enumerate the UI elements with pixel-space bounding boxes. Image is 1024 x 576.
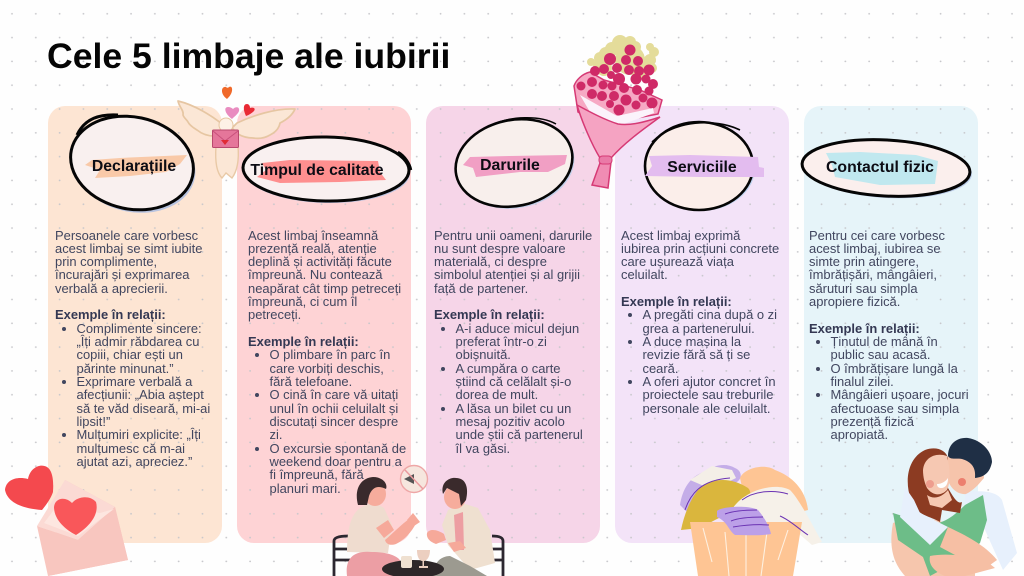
text: Timpul de calitate description and examples: petreceți. bbox=[248, 307, 301, 322]
text: Timpul de calitate description and examples: care vorbiți deschis, bbox=[270, 361, 384, 376]
text: Contactul fizic description and examples: apropiere fizică. bbox=[809, 294, 900, 309]
text: Declarațiile description and examples: Exemple în relații: bbox=[55, 307, 166, 322]
text: Darurile description and examples bbox=[434, 228, 592, 456]
text: Declarațiile description and examples bbox=[54, 228, 210, 469]
heading badge: Contactul fizic: Contactul fizic bbox=[826, 159, 934, 176]
heading badge: Timpul de calitate bbox=[242, 136, 411, 204]
text: Contactul fizic description and examples: acest limbaj, iubirea se bbox=[809, 241, 941, 256]
text: Timpul de calitate description and examples: Acest limbaj înseamnă bbox=[248, 228, 378, 242]
text: Darurile description and examples: dorea de mult. bbox=[456, 387, 538, 402]
text: Timpul de calitate description and examples: fi împreună, fără bbox=[270, 467, 364, 482]
text: Darurile description and examples: materială, ci despre bbox=[434, 254, 547, 269]
text: Declarațiile description and examples: să te văd diseară, mi-ai bbox=[76, 401, 210, 416]
text: Darurile description and examples: A cumpăra o carte bbox=[456, 361, 560, 376]
text: Serviciile description and examples: A oferi ajutor concret în bbox=[642, 374, 776, 389]
text: Darurile description and examples: unde știi că partenerul bbox=[456, 427, 583, 442]
title: Cele 5 limbaje ale iubirii bbox=[47, 36, 450, 76]
panel: Declarațiile background bbox=[48, 106, 222, 543]
text: Serviciile description and examples: grea a partenerului. bbox=[642, 321, 755, 336]
text: Timpul de calitate description and examples: planuri mari. bbox=[270, 481, 341, 496]
text: Contactul fizic description and examples: finalul zilei. bbox=[830, 374, 894, 389]
text: Declarațiile description and examples: prin complimente, bbox=[55, 254, 157, 269]
heading badge: Serviciile: Serviciile bbox=[667, 159, 737, 176]
text: Declarațiile description and examples: părinte minunat.” bbox=[76, 361, 174, 376]
text: Timpul de calitate description and examples: unul în ochii celuilalt și bbox=[270, 401, 398, 416]
illustration: couple talking at a table bbox=[334, 466, 503, 576]
text: Darurile description and examples: A lăsa un bilet cu un bbox=[456, 401, 571, 416]
heading badge: Serviciile bbox=[645, 122, 764, 211]
icon: heart and envelope bbox=[5, 466, 128, 576]
text: Contactul fizic description and examples: Mângâieri ușoare, jocuri bbox=[830, 387, 969, 402]
text: Contactul fizic description and examples: prezență fizică bbox=[830, 414, 914, 429]
text: Serviciile description and examples: iubirea prin acțiuni concrete bbox=[621, 241, 779, 256]
heading badge: Timpul de calitate: Timpul de calitate bbox=[250, 162, 384, 179]
text: Serviciile description and examples: personale ale celuilalt. bbox=[642, 401, 771, 416]
text: Serviciile description and examples: Exemple în relații: bbox=[621, 294, 732, 309]
text: Timpul de calitate description and examples: prezență reală, atenție bbox=[248, 241, 377, 256]
panel: Darurile background bbox=[426, 106, 600, 543]
illustration: laundry basket bbox=[680, 465, 822, 576]
panel: Timpul de calitate background bbox=[237, 106, 411, 543]
text: Timpul de calitate description and examples: O plimbare în parc în bbox=[270, 347, 390, 362]
text: Darurile description and examples: mesaj pozitiv acolo bbox=[456, 414, 565, 429]
text: Declarațiile description and examples: încurajări și exprimarea bbox=[55, 267, 189, 282]
text: Timpul de calitate description and examples: O excursie spontană de bbox=[270, 441, 406, 456]
text: Darurile description and examples: nu sunt despre valoare bbox=[434, 241, 566, 256]
text: Declarațiile description and examples: „Îți admir răbdarea cu bbox=[76, 334, 199, 349]
text: Serviciile description and examples bbox=[621, 228, 779, 416]
text: Contactul fizic description and examples: Pentru cei care vorbesc bbox=[809, 228, 945, 242]
heading badge: Darurile bbox=[447, 109, 583, 219]
text: Serviciile description and examples: ceară. bbox=[642, 361, 678, 376]
text: Timpul de calitate description and examples: împreună, ci cum îl bbox=[248, 294, 357, 309]
text: Declarațiile description and examples: Persoanele care vorbesc bbox=[55, 228, 198, 242]
text: Timpul de calitate description and examples: împreună. Nu contează bbox=[248, 267, 382, 282]
text: Contactul fizic description and examples: îmbrățișări, mângâieri, bbox=[809, 267, 937, 282]
text: Serviciile description and examples: proiectele sau treburile bbox=[642, 387, 773, 402]
text: Timpul de calitate description and examples: O cină în care vă uitați bbox=[270, 387, 398, 402]
text: Darurile description and examples: obișnuită. bbox=[456, 347, 511, 362]
text: Darurile description and examples: Exemple în relații: bbox=[434, 307, 545, 322]
text: Darurile description and examples: îl va găsi. bbox=[456, 441, 510, 456]
text: Declarațiile description and examples: acest limbaj se simt iubite bbox=[55, 241, 202, 256]
text: Timpul de calitate description and examples: zi. bbox=[270, 427, 282, 442]
text: Contactul fizic description and examples: public sau acasă. bbox=[830, 347, 930, 362]
text: Darurile description and examples: preferat într-o zi bbox=[456, 334, 547, 349]
text: Timpul de calitate description and examples bbox=[248, 228, 406, 496]
text: Contactul fizic description and examples: apropiată. bbox=[830, 427, 888, 442]
text: Serviciile description and examples: care ușurează viața bbox=[621, 254, 734, 269]
text: Serviciile description and examples: celuilalt. bbox=[621, 267, 668, 282]
text: Declarațiile description and examples: Mulțumiri explicite: „Îți bbox=[76, 427, 201, 442]
text: Darurile description and examples: știind că celălalt și-o bbox=[456, 374, 571, 389]
panel: Contactul fizic background bbox=[804, 106, 978, 543]
text: Contactul fizic description and examples: săruturi sau simpla bbox=[809, 281, 918, 296]
text: Contactul fizic description and examples: simte prin atingere, bbox=[809, 254, 919, 269]
text: Timpul de calitate description and examples: deplină și activități făcute bbox=[248, 254, 392, 269]
heading badge: Darurile: Darurile bbox=[480, 157, 540, 174]
text: Declarațiile description and examples: Exprimare verbală a bbox=[76, 374, 192, 389]
text: Declarațiile description and examples: ajutat azi, apreciez.” bbox=[76, 454, 192, 469]
text: Timpul de calitate description and examples: neapărat cât timp petreceți bbox=[248, 281, 401, 296]
illustration: hugging couple bbox=[891, 438, 1017, 576]
text: Darurile description and examples: simbolul atenției și al grijii bbox=[434, 267, 580, 282]
text: Timpul de calitate description and examples: weekend doar pentru a bbox=[270, 454, 402, 469]
icon: dove carrying a love letter bbox=[178, 87, 295, 178]
text: Serviciile description and examples: A pregăti cina după o zi bbox=[642, 307, 777, 322]
heading badge: Declarațiile bbox=[62, 105, 204, 224]
icon: bouquet of flowers bbox=[574, 35, 662, 188]
heading badge: Contactul fizic bbox=[801, 136, 973, 202]
heading badge: Declarațiile: Declarațiile bbox=[92, 158, 176, 175]
text: Contactul fizic description and examples bbox=[808, 228, 969, 442]
text: Contactul fizic description and examples: O îmbrățișare lungă la bbox=[830, 361, 958, 376]
text: Declarațiile description and examples: verbală a aprecierii. bbox=[55, 281, 168, 296]
text: Declarațiile description and examples: mulțumesc că m-ai bbox=[76, 441, 185, 456]
panel: Serviciile background bbox=[615, 106, 789, 543]
text: Darurile description and examples: Pentru unii oameni, darurile bbox=[434, 228, 592, 242]
text: Contactul fizic description and examples: afectuoase sau simpla bbox=[830, 401, 959, 416]
text: Serviciile description and examples: A duce mașina la bbox=[642, 334, 741, 349]
text: Contactul fizic description and examples: Ținutul de mână în bbox=[830, 334, 938, 349]
text: Serviciile description and examples: Acest limbaj exprimă bbox=[621, 228, 740, 242]
text: Timpul de calitate description and examples: Exemple în relații: bbox=[248, 334, 359, 349]
text: Timpul de calitate description and examples: fără telefoane. bbox=[270, 374, 352, 389]
text: Declarațiile description and examples: afecțiunii: „Abia aștept bbox=[76, 387, 204, 402]
text: Darurile description and examples: A-i aduce micul dejun bbox=[456, 321, 579, 336]
text: Declarațiile description and examples: copiii, chiar ești un bbox=[76, 347, 183, 362]
text: Declarațiile description and examples: lipsit!” bbox=[76, 414, 110, 429]
text: Declarațiile description and examples: Complimente sincere: bbox=[76, 321, 202, 336]
text: Darurile description and examples: față de partener. bbox=[434, 281, 528, 296]
text: Serviciile description and examples: revizie fără să ți se bbox=[642, 347, 750, 362]
text: Contactul fizic description and examples: Exemple în relații: bbox=[809, 321, 920, 336]
text: Timpul de calitate description and examples: discutați sincer despre bbox=[270, 414, 398, 429]
